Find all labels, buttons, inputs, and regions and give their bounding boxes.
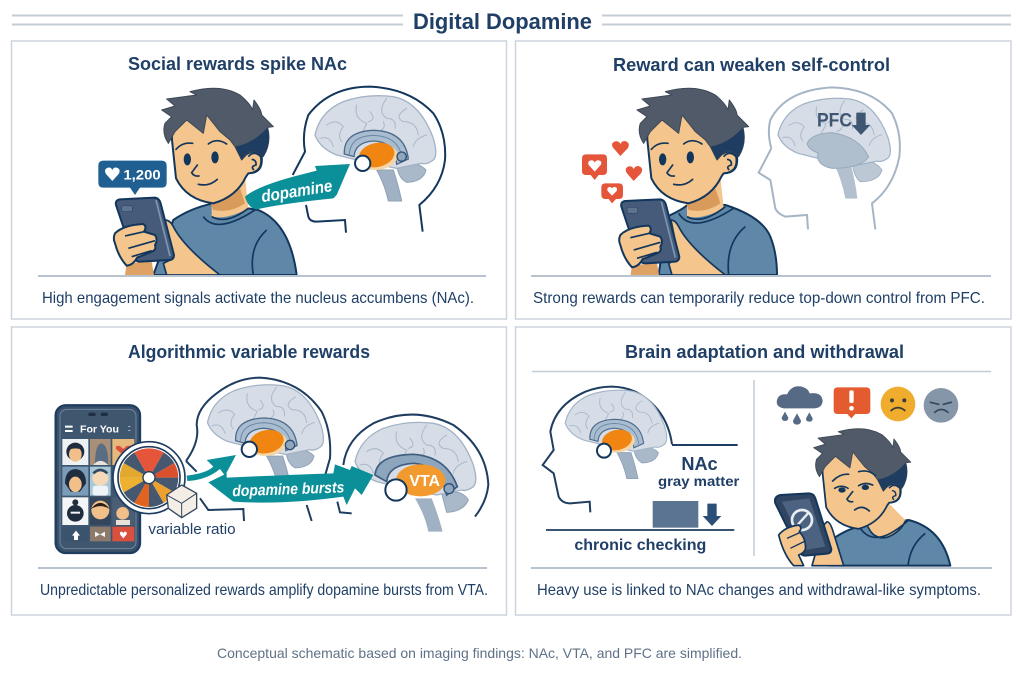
title bbox=[12, 9, 1011, 34]
first head and brain bbox=[186, 378, 330, 521]
caption: High engagement signals activate the nucleus accumbens (NAc). bbox=[42, 290, 474, 307]
person looking at phone bbox=[619, 88, 777, 277]
sad face features bbox=[833, 471, 875, 511]
label: NAc gray matter bbox=[658, 453, 740, 489]
floating hearts and reaction bubbles bbox=[582, 141, 642, 203]
illustration: adaptation and withdrawal bbox=[543, 386, 958, 566]
heading: adaptation: Brain adaptation and withdrawal bbox=[625, 342, 904, 362]
head and brain bbox=[543, 387, 738, 512]
like count badge bbox=[98, 161, 167, 195]
faded head outline and brain with reduced PFC bbox=[759, 87, 900, 229]
person looking at phone bbox=[114, 88, 297, 275]
sad person with phone bbox=[775, 429, 950, 566]
variable ratio wheel bbox=[113, 442, 185, 514]
thumbnail grid bbox=[62, 439, 134, 541]
heading: algorithmic: Algorithmic variable rewards bbox=[128, 342, 370, 362]
label: NAc gray matter: gray matter bbox=[658, 473, 740, 489]
arrow: dopamine bbox=[245, 164, 350, 209]
head outline and brain with NAc bbox=[293, 87, 445, 233]
phone feed: For You bbox=[56, 405, 140, 553]
label: VTA: VTA bbox=[409, 473, 440, 490]
label: NAc gray matter: NAc bbox=[681, 453, 718, 474]
panel: reward can weaken self-control bbox=[516, 41, 1011, 319]
icon: rain cloud bbox=[777, 386, 823, 425]
illustration: person with phone and brain bbox=[98, 87, 445, 275]
caption: Unpredictable personalized rewards amplify dopamine bursts from VTA. bbox=[40, 582, 488, 599]
illustration: feed, wheel, brains bbox=[56, 378, 488, 553]
footer note: Conceptual schematic based on imaging findings: NAc, VTA, and PFC are simplified. bbox=[217, 645, 742, 661]
illustration: person with hearts and dimmed brain bbox=[582, 87, 900, 277]
label: chronic checking: chronic checking bbox=[574, 537, 706, 554]
label: variable ratio: variable ratio bbox=[148, 522, 236, 538]
gray matter bar with down arrow bbox=[546, 501, 734, 530]
icon: die bbox=[167, 485, 197, 518]
panel: algorithmic variable rewards bbox=[12, 327, 506, 615]
second head and brain with VTA bbox=[337, 415, 488, 532]
double arrow: dopamine bursts bbox=[208, 464, 373, 505]
like count badge: 1,200 bbox=[123, 166, 161, 182]
heading: reward: Reward can weaken self-control bbox=[613, 55, 890, 75]
heading: social rewards: Social rewards spike NAc bbox=[128, 54, 347, 74]
panel: social rewards spike NAc bbox=[12, 41, 506, 319]
icon: sad yellow face bbox=[881, 387, 915, 421]
title: Digital Dopamine bbox=[413, 9, 592, 34]
double arrow: dopamine bursts: dopamine bursts bbox=[232, 479, 345, 500]
phone feed: For You: For You bbox=[80, 424, 119, 435]
icon: sad gray face bbox=[924, 388, 958, 423]
panel: brain adaptation and withdrawal bbox=[516, 327, 1011, 615]
label: PFC with down arrow: PFC bbox=[817, 111, 852, 132]
caption: Heavy use is linked to NAc changes and withdrawal-like symptoms. bbox=[537, 582, 981, 599]
small teal arrow to brain bbox=[187, 455, 236, 481]
arrow: dopamine: dopamine bbox=[260, 176, 334, 206]
icon: alert bbox=[834, 387, 870, 418]
caption: Strong rewards can temporarily reduce top-down control from PFC. bbox=[533, 290, 985, 307]
label: PFC with down arrow bbox=[817, 111, 870, 135]
